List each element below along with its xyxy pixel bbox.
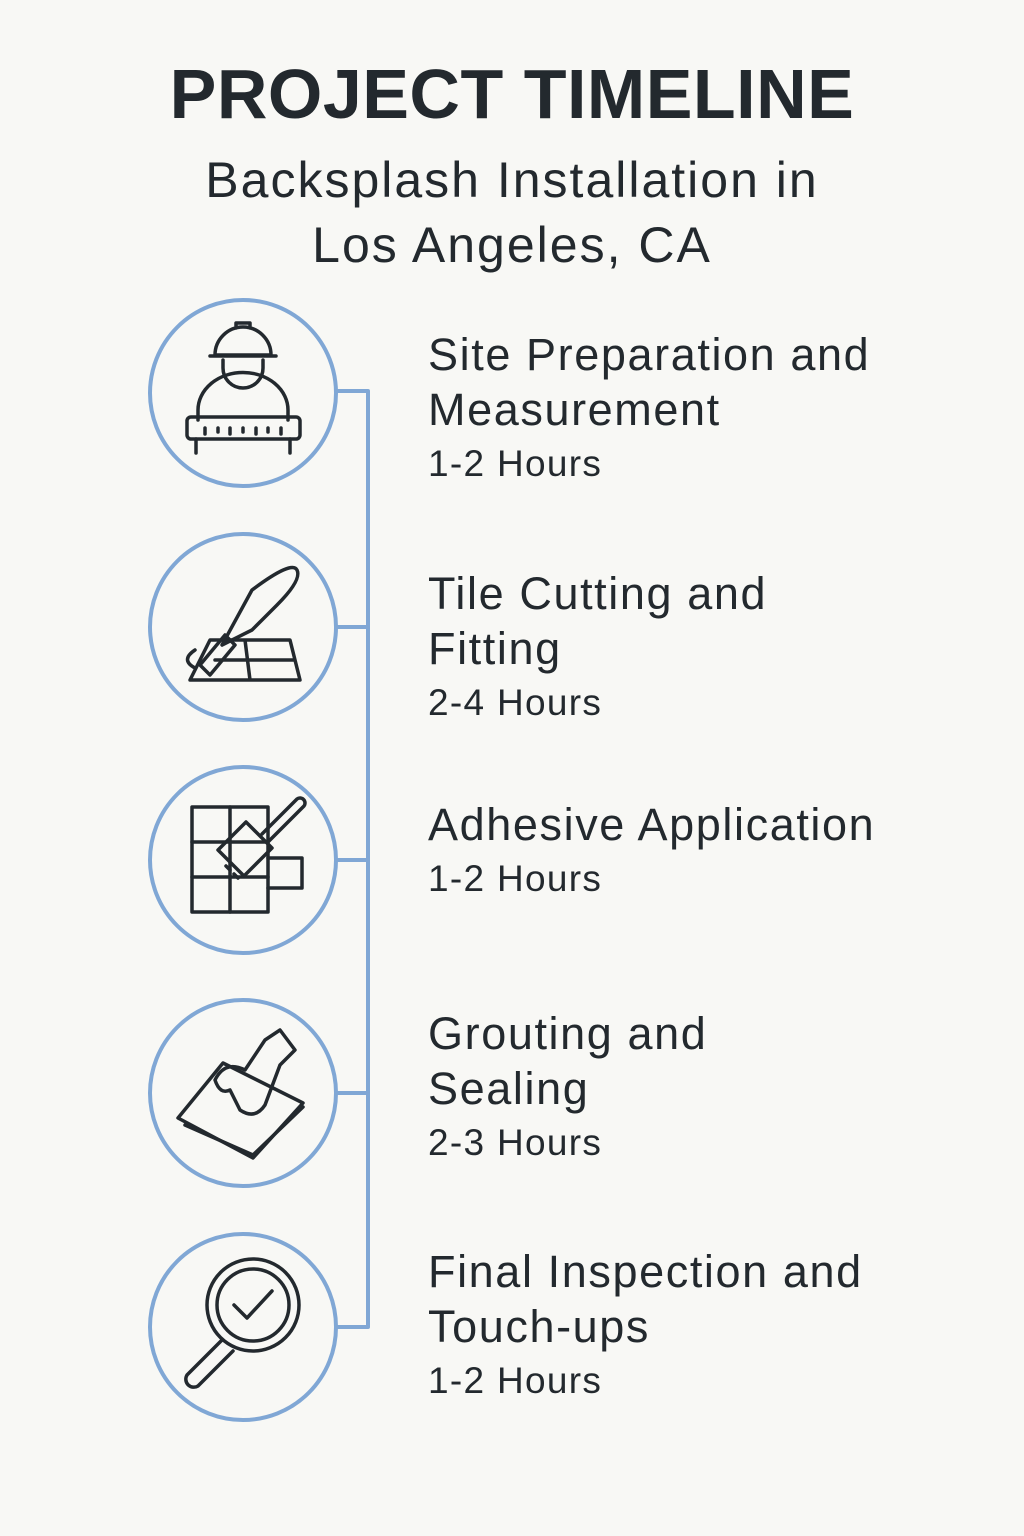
icon: grouting (150, 1000, 336, 1186)
step 5 text: 1-2 Hours (428, 1360, 602, 1401)
step 2 text: Tile Cutting and (428, 568, 767, 619)
step 2 text: 2-4 Hours (428, 682, 602, 723)
subtitle (205, 152, 819, 273)
step 4 text (428, 1008, 707, 1163)
step 4 text: Grouting and (428, 1008, 707, 1059)
step 1 text: Site Preparation and (428, 329, 870, 380)
step 1 text (428, 329, 870, 484)
subtitle: Los Angeles, CA (312, 217, 712, 273)
subtitle: Backsplash Installation in (205, 152, 819, 208)
step 3 text: Adhesive Application (428, 799, 875, 850)
step 1 text: Measurement (428, 384, 721, 435)
step 4 text: 2-3 Hours (428, 1122, 602, 1163)
icon: worker (150, 300, 336, 486)
step 5 text: Final Inspection and (428, 1246, 863, 1297)
step 2 text: Fitting (428, 623, 562, 674)
step 3 text: 1-2 Hours (428, 858, 602, 899)
icon: magnifier (150, 1234, 336, 1420)
icon: adhesive trowel (150, 767, 336, 953)
step 5 text (428, 1246, 863, 1401)
step 3 text (428, 799, 875, 899)
step 1 text: 1-2 Hours (428, 443, 602, 484)
step 2 text (428, 568, 767, 723)
icon: tile cutting (150, 534, 336, 720)
step 5 text: Touch-ups (428, 1301, 650, 1352)
title: PROJECT TIMELINE (170, 55, 854, 133)
step 4 text: Sealing (428, 1063, 589, 1114)
